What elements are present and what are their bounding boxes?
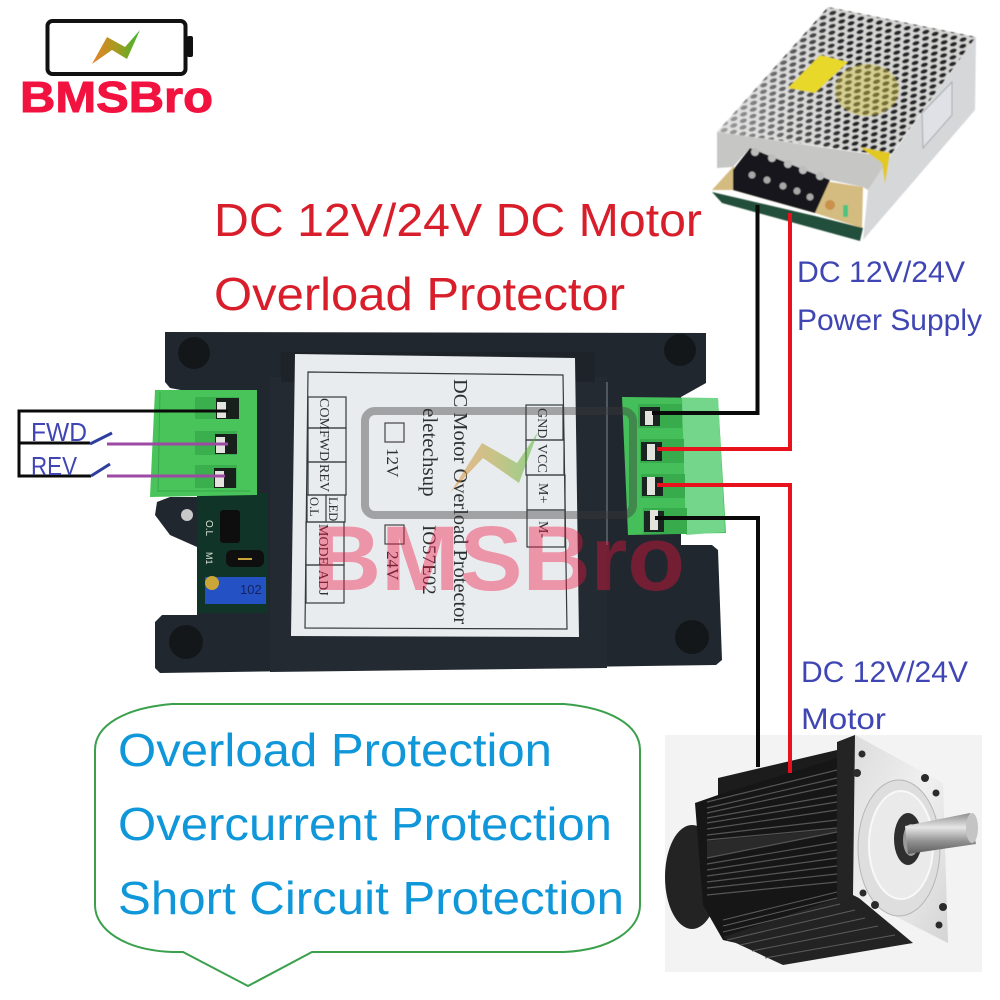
watermark bolt xyxy=(450,432,538,493)
logo battery terminal xyxy=(187,36,193,57)
callout: protection features xyxy=(95,704,640,986)
sticker background xyxy=(291,354,579,637)
motor rear cap xyxy=(665,825,719,929)
device mounting holes xyxy=(169,334,709,659)
watermark xyxy=(313,411,685,610)
left pin labels: LED xyxy=(326,497,340,521)
device inner shell xyxy=(270,377,607,672)
psu capacitor xyxy=(825,200,835,210)
psu corner sticker xyxy=(860,147,890,184)
REV switch xyxy=(91,464,110,476)
title xyxy=(214,194,702,320)
motor top housing xyxy=(718,750,837,810)
motor middle band xyxy=(707,829,837,858)
psu screw posts xyxy=(751,148,824,180)
callout line two: Overcurrent Protection xyxy=(118,798,612,850)
right terminal slots xyxy=(638,404,687,534)
motor shaft end xyxy=(966,813,978,843)
24V checkbox xyxy=(385,525,404,544)
callout line one: Overload Protection xyxy=(118,724,552,776)
left terminal slots xyxy=(195,397,239,488)
callout line three: Short Circuit Protection xyxy=(118,872,624,924)
logo bolt xyxy=(92,30,140,64)
right pin labels: GND xyxy=(534,408,549,438)
trimmer screw xyxy=(205,576,219,590)
motor flange ring xyxy=(858,780,940,916)
board silk text M1: M1 xyxy=(204,552,214,565)
jumper pin xyxy=(238,558,252,560)
motor fins upper xyxy=(707,770,837,840)
right pin labels: M- xyxy=(535,521,550,538)
wire: FWD purple xyxy=(107,442,228,446)
right terminal light face xyxy=(682,398,725,535)
psu terminal block xyxy=(733,148,830,213)
left pin labels: ADJ xyxy=(315,570,330,596)
psu side panel xyxy=(863,37,976,240)
board jumper xyxy=(220,510,240,543)
motor photo background xyxy=(665,735,982,972)
sticker brand: eletechsup xyxy=(418,408,442,497)
psu yellow sticker xyxy=(788,55,848,93)
right pin labels: VCC xyxy=(534,444,549,473)
wire: REV purple xyxy=(107,474,225,478)
title line two: Overload Protector xyxy=(214,268,625,320)
12V checkbox xyxy=(385,423,404,442)
psu circuit board edge xyxy=(712,192,863,241)
watermark battery xyxy=(365,411,633,515)
wires: FWD and REV switches xyxy=(19,411,228,476)
psu top sheen xyxy=(717,7,976,156)
psu front panel xyxy=(717,132,890,190)
motor fins lower xyxy=(707,832,837,895)
logo battery outline xyxy=(48,21,186,74)
circuit board xyxy=(197,493,268,613)
board silk text O.L: O.L xyxy=(203,520,214,537)
motor label line two: Motor xyxy=(801,703,886,736)
motor bearing xyxy=(894,813,922,865)
psu led xyxy=(843,205,848,217)
motor flange bolts xyxy=(853,750,947,928)
sticker title: DC Motor Overload Protector xyxy=(449,379,471,624)
device label sticker xyxy=(291,354,579,637)
left pin labels: MODE xyxy=(315,524,330,565)
wire: power GND black xyxy=(652,205,758,413)
wire: common black xyxy=(19,411,228,476)
left terminal body xyxy=(150,390,257,497)
logo wordmark: BMSBro xyxy=(20,73,213,122)
board header xyxy=(226,550,264,567)
device side ear highlight xyxy=(181,509,193,521)
wires: power and motor xyxy=(652,205,790,773)
motor flange arc xyxy=(869,791,933,899)
motor underside xyxy=(723,893,913,965)
REV label: REV xyxy=(31,451,78,481)
watermark wordmark: BMSBro xyxy=(313,508,685,610)
sticker outline xyxy=(305,372,567,629)
right pin table xyxy=(526,405,565,547)
motor label line one: DC 12V/24V xyxy=(801,656,968,689)
device top recess xyxy=(281,352,595,382)
left terminal base line xyxy=(158,490,250,492)
motor flange collar xyxy=(837,735,855,903)
psu circuit board top xyxy=(712,167,863,228)
motor fins bottom xyxy=(723,892,895,958)
psu side label xyxy=(922,82,952,148)
sticker model: IO57E02 xyxy=(418,525,439,595)
motor body side xyxy=(695,758,837,945)
left pin labels: O.L xyxy=(307,497,321,517)
psu yellow glow through holes xyxy=(835,64,899,116)
right green terminal xyxy=(622,397,726,535)
right pin labels: M+ xyxy=(535,483,550,503)
motor shaft xyxy=(905,813,976,854)
right terminal body xyxy=(622,397,726,535)
right terminal pins xyxy=(645,411,658,530)
device enclosure xyxy=(155,332,722,673)
motor photo xyxy=(665,735,982,972)
wire: FWD black stub xyxy=(19,442,90,444)
device body xyxy=(155,332,722,673)
motor label xyxy=(801,656,968,736)
left pin labels: FWD xyxy=(316,430,331,461)
FWD switch xyxy=(90,433,112,444)
wire: motor M- black xyxy=(655,518,758,767)
power supply unit xyxy=(712,7,976,241)
power supply label line two: Power Supply xyxy=(797,304,982,337)
device edge highlight xyxy=(606,382,608,545)
left terminal seam xyxy=(158,392,160,492)
psu screws xyxy=(748,172,814,200)
12V label: 12V xyxy=(383,448,402,478)
left green terminal xyxy=(150,390,257,497)
right pin labels xyxy=(534,408,550,538)
power supply label line one: DC 12V/24V xyxy=(797,256,965,289)
title line one: DC 12V/24V DC Motor xyxy=(214,194,702,246)
left pin table xyxy=(306,397,346,603)
trimmer value: 102 xyxy=(240,582,262,597)
callout bubble xyxy=(95,704,640,986)
24V label: 24V xyxy=(383,551,402,581)
motor bearing inner xyxy=(903,824,919,856)
left terminal pins xyxy=(215,402,226,487)
wire: motor M+ red xyxy=(657,485,790,773)
FWD label: FWD xyxy=(31,417,87,447)
right terminal windows xyxy=(640,407,664,532)
left pin labels: COM xyxy=(316,398,331,430)
logo: BMSBro battery xyxy=(20,21,213,122)
blue trimmer xyxy=(205,577,266,604)
power supply label xyxy=(797,256,982,337)
wire: power VCC red xyxy=(657,213,790,449)
motor flange face xyxy=(853,735,948,943)
psu perforated top xyxy=(717,7,976,156)
left terminal windows xyxy=(214,398,239,488)
left pin labels: REV xyxy=(316,464,331,492)
left pin labels xyxy=(307,398,340,596)
